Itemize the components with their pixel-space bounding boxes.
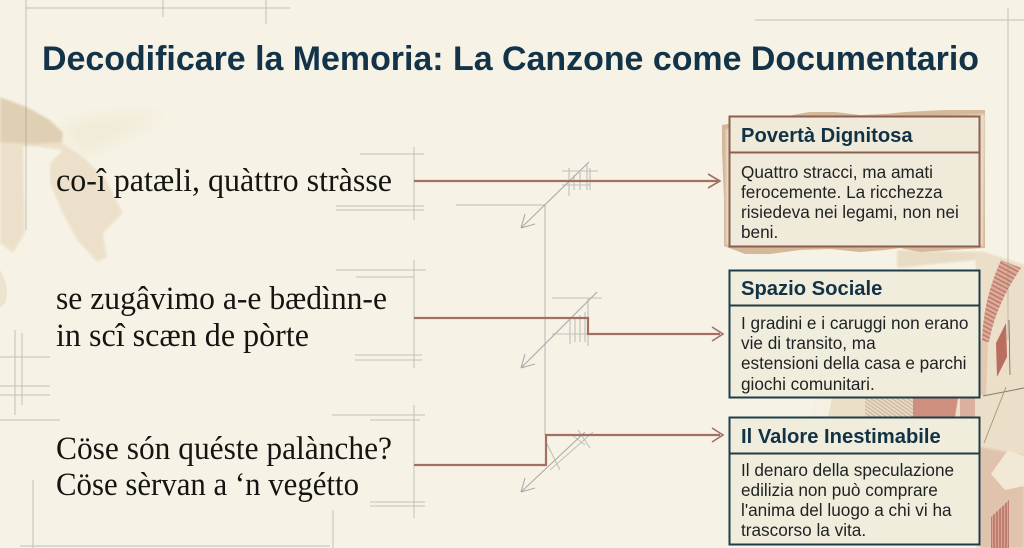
text: Povertà Dignitosa body: risiedeva nei legami, non nei bbox=[741, 202, 959, 222]
arrow: lyric 2 to Spazio Sociale bbox=[414, 318, 723, 341]
heading: Spazio Sociale: Spazio Sociale bbox=[741, 278, 882, 300]
water stain top left bbox=[0, 97, 170, 308]
text: Spazio Sociale body: estensioni della casa e parchi bbox=[741, 353, 966, 373]
grey sketched diagonal arrows and guide lines bbox=[456, 162, 602, 492]
lyric 2: se zugâvimo a-e bædìnn-e bbox=[56, 281, 387, 317]
text: Il Valore Inestimabile body: l'anima del luogo a chi vi ha bbox=[741, 500, 952, 520]
lyric 3 bbox=[56, 431, 392, 503]
lyric 1: co-î patæli, quàttro stràsse bbox=[56, 163, 392, 199]
text: Spazio Sociale body: vie di transito, ma bbox=[741, 333, 876, 353]
heading: Povertà Dignitosa: Povertà Dignitosa bbox=[741, 125, 913, 147]
lyric 2: in scî scæn de pòrte bbox=[56, 318, 309, 354]
text: Il Valore Inestimabile body: edilizia non può comprare bbox=[741, 480, 938, 500]
panel: Povertà Dignitosa bbox=[730, 116, 980, 246]
text: Povertà Dignitosa body: Quattro stracci, ma amati bbox=[741, 162, 933, 182]
panel: Spazio Sociale bbox=[730, 270, 980, 398]
lyric 2 bbox=[56, 281, 387, 354]
text: Il Valore Inestimabile body bbox=[741, 460, 954, 540]
text: Il Valore Inestimabile body: Il denaro della speculazione bbox=[741, 460, 954, 480]
title: Decodificare la Memoria: La Canzone come Documentario bbox=[42, 40, 979, 78]
arrow: lyric 1 to Povertà Dignitosa bbox=[414, 174, 720, 188]
sketch of Ligurian building bottom right bbox=[810, 250, 1024, 548]
panel: Il Valore Inestimabile bbox=[730, 418, 980, 544]
text: Il Valore Inestimabile body: trascorso la vita. bbox=[741, 520, 866, 540]
arrow: lyric 3 to Il Valore Inestimabile bbox=[414, 428, 723, 465]
text: Povertà Dignitosa body bbox=[741, 162, 959, 242]
text: Spazio Sociale body: I gradini e i caruggi non erano bbox=[741, 313, 968, 333]
text: Spazio Sociale body bbox=[741, 313, 968, 394]
text: Spazio Sociale body: giochi comunitari. bbox=[741, 374, 875, 394]
text: Povertà Dignitosa body: ferocemente. La ricchezza bbox=[741, 182, 943, 202]
torn paper behind first card bbox=[722, 110, 985, 254]
text: Povertà Dignitosa body: beni. bbox=[741, 222, 778, 242]
lyric 3: Cöse són quéste palànche? bbox=[56, 431, 392, 467]
heading: Il Valore Inestimabile: Il Valore Inestimabile bbox=[741, 426, 941, 448]
lyric 3: Cöse sèrvan a ‘n vegétto bbox=[56, 467, 359, 503]
